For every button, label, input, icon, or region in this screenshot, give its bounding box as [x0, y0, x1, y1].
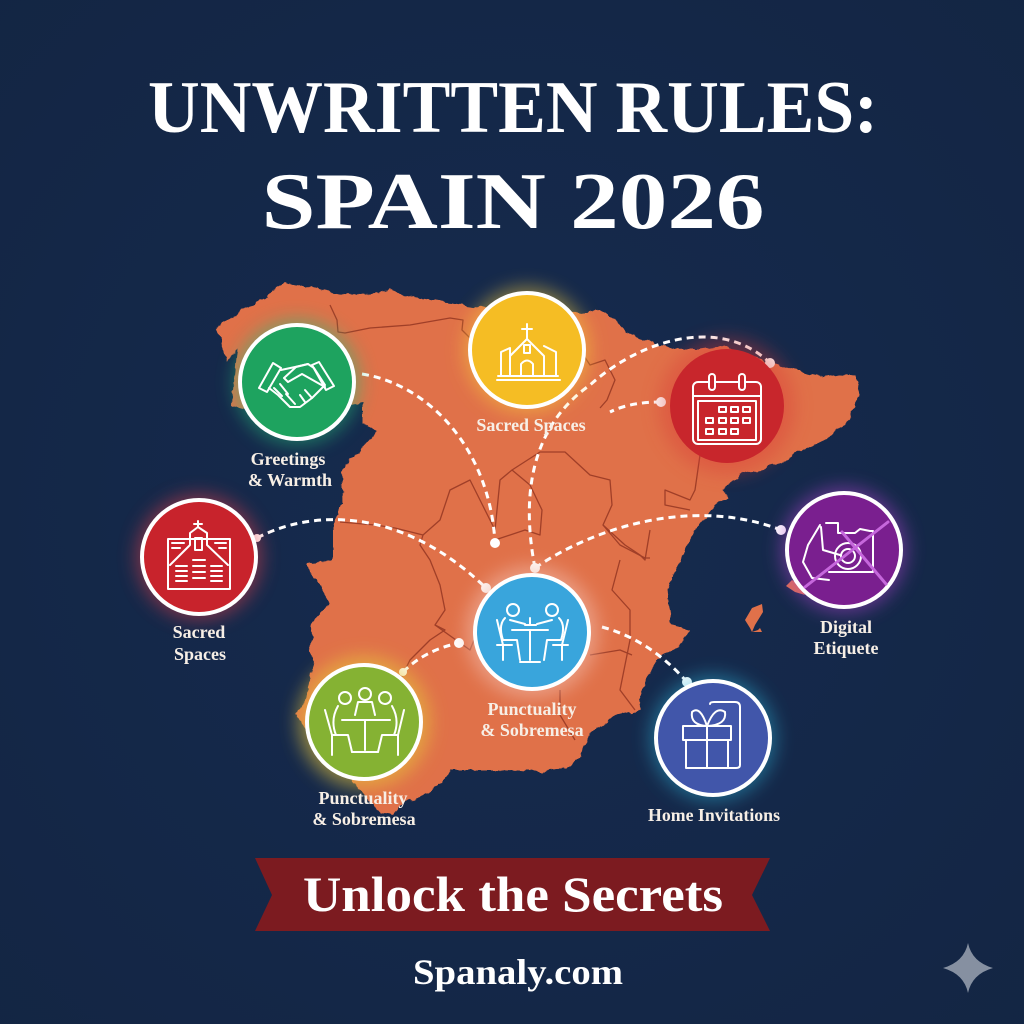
- island: Menorca: [786, 580, 805, 595]
- panel: sacred spaces left: [136, 494, 262, 664]
- panel: calendar: [659, 338, 795, 474]
- panel: home invitations: [648, 675, 780, 825]
- label: Spaces: [174, 644, 226, 664]
- connector lines: [253, 337, 786, 687]
- title: [148, 67, 878, 246]
- title: SPAIN 2026: [262, 158, 764, 246]
- label: Punctuality: [487, 699, 577, 719]
- label: Digital: [820, 617, 872, 637]
- icon: calendar: [693, 374, 761, 444]
- island: Mallorca: [745, 604, 763, 632]
- label: & Sobremesa: [312, 809, 416, 829]
- panel: greetings and warmth: [234, 319, 360, 490]
- icon: handshake: [259, 362, 334, 407]
- panel: digital etiquette: [781, 487, 907, 658]
- website: Spanaly.com: [413, 952, 623, 992]
- banner: [255, 858, 770, 931]
- icon: two people at table: [497, 604, 568, 662]
- map of Spain: [217, 282, 860, 815]
- banner: Unlock the Secrets: [303, 866, 723, 922]
- label: Sacred Spaces: [476, 415, 586, 435]
- panel: punctuality and sobremesa lower left: [298, 656, 430, 829]
- label: Home Invitations: [648, 805, 780, 825]
- panel: punctuality and sobremesa center: [466, 566, 598, 740]
- icon: sparkle: [943, 943, 993, 993]
- icon: group at table: [325, 688, 404, 755]
- label: Punctuality: [318, 788, 408, 808]
- icon: chapel: [497, 324, 560, 380]
- label: Greetings: [251, 449, 325, 469]
- icon: gift and phone: [683, 702, 740, 768]
- label: Etiquete: [814, 638, 879, 658]
- label: & Sobremesa: [480, 720, 584, 740]
- region borders: [330, 305, 700, 740]
- label: Sacred: [173, 622, 225, 642]
- label: & Warmth: [248, 470, 332, 490]
- panel: sacred spaces top: [464, 287, 590, 435]
- title: UNWRITTEN RULES:: [148, 67, 878, 149]
- icon: church facade: [168, 521, 230, 589]
- icon: crossed-out camera: [803, 522, 888, 587]
